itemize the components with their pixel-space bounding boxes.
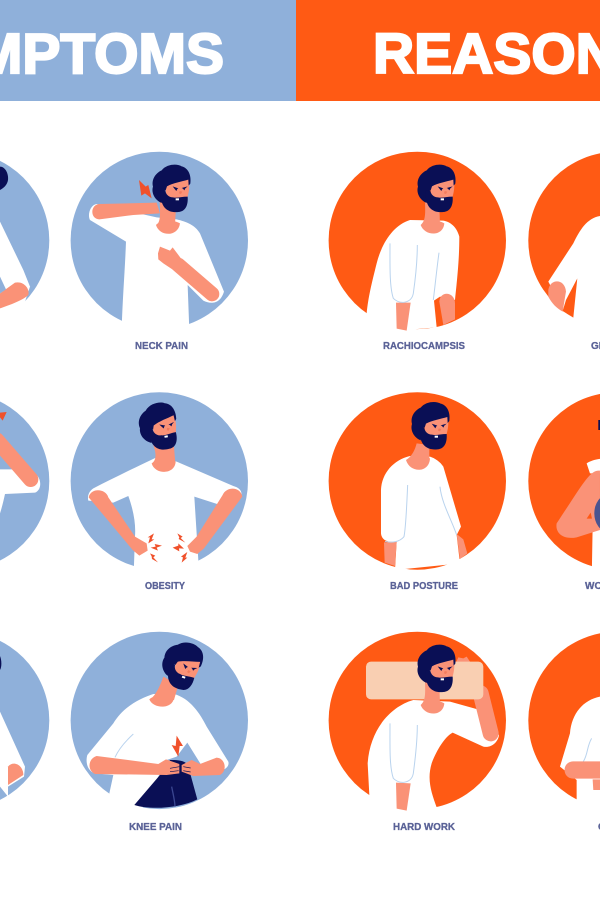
panel: rachiocampsis — [329, 152, 506, 333]
head — [156, 637, 207, 693]
raised arm — [92, 203, 160, 219]
neck — [406, 443, 430, 470]
panel: partial symptom row 2 — [0, 392, 49, 570]
label: hard work: HARD WORK — [393, 822, 456, 833]
head — [152, 165, 191, 212]
label: rachiocampsis: RACHIOCAMPSIS — [383, 341, 465, 352]
right arm and hand — [182, 758, 225, 776]
neck — [421, 678, 444, 714]
neck — [421, 198, 444, 234]
panel: bad posture — [329, 392, 506, 570]
sleeve lines — [390, 723, 417, 782]
shirt — [381, 456, 461, 570]
label: bad posture: BAD POSTURE — [390, 581, 458, 592]
panel: partial reason row 3 — [528, 632, 600, 823]
icons: pain bolts — [148, 533, 187, 563]
neck — [149, 677, 178, 707]
neck — [156, 195, 180, 234]
shirt — [88, 457, 242, 583]
panel: neck pain — [71, 152, 248, 330]
left arm — [396, 303, 411, 331]
shirt — [367, 220, 459, 333]
panel: obesity — [71, 392, 248, 583]
header: symptoms banner — [0, 0, 296, 101]
label: neck pain: NECK PAIN — [135, 341, 188, 352]
sleeve lines — [385, 485, 457, 542]
right arm — [457, 534, 467, 559]
trousers — [134, 760, 197, 808]
blue fold line — [115, 734, 133, 757]
chest arm — [178, 265, 212, 294]
neck — [152, 443, 176, 472]
shirt — [367, 700, 499, 820]
head — [411, 402, 450, 449]
forearm — [481, 693, 491, 733]
hand on board — [456, 657, 471, 663]
left arm — [384, 542, 397, 566]
icon: pain bolt — [172, 736, 183, 757]
header: reasons banner — [296, 0, 600, 101]
head — [417, 165, 456, 212]
panel: partial symptom row 3 — [0, 632, 49, 809]
hand — [158, 247, 182, 270]
knuckle lines — [170, 767, 191, 772]
panel: knee pain — [71, 632, 248, 823]
sleeve lines — [390, 243, 439, 302]
shirt — [87, 694, 229, 823]
right arm — [187, 489, 242, 554]
left arm — [89, 490, 148, 556]
left arm — [396, 783, 411, 811]
panel: hard work — [329, 632, 506, 820]
label: obesity: OBESITY — [145, 581, 185, 592]
head — [136, 400, 181, 453]
label: knee pain: KNEE PAIN — [129, 822, 182, 833]
left arm and hand — [90, 756, 179, 775]
shirt — [89, 204, 224, 330]
panel: partial reason row 2 — [528, 392, 600, 583]
right arm — [439, 294, 455, 325]
panel: partial symptom row 1 — [0, 152, 49, 329]
head — [417, 645, 456, 692]
board — [366, 662, 483, 699]
panel: partial reason row 1 — [528, 152, 600, 333]
icon: pain bolt — [139, 180, 152, 198]
